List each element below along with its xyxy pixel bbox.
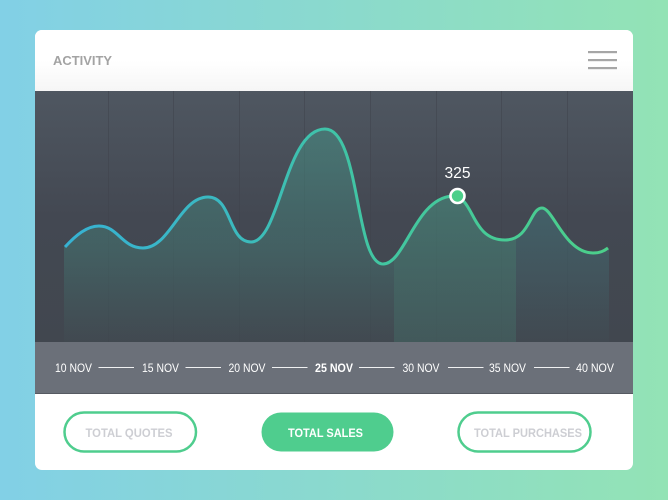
axis label: 10 NOV: 10 NOV [55,363,92,375]
button: total sales (active) [262,412,394,452]
data label: 325: 325 [444,165,470,182]
button: total sales (active): TOTAL SALES [288,426,363,440]
button: total quotes: TOTAL QUOTES [86,426,172,440]
axis label: 20 NOV: 20 NOV [228,363,266,375]
axis label: 25 NOV (active): 25 NOV [315,363,353,375]
panel: card header [35,30,633,91]
marker: selected data point [450,189,464,203]
axis label: 40 NOV: 40 NOV [576,363,614,375]
panel: activity card [35,30,633,470]
axis label: 30 NOV: 30 NOV [402,363,440,375]
chart: activity line [65,129,608,264]
button: total quotes [64,412,196,452]
button: total purchases [458,412,590,452]
axis label: 15 NOV: 15 NOV [142,363,179,375]
axis label: 35 NOV: 35 NOV [489,363,526,375]
panel: chart area [35,91,633,342]
heading: activity: ACTIVITY [53,53,112,68]
panel: date axis bar [35,342,633,394]
button: total purchases: TOTAL PURCHASES [474,426,582,440]
chart: area fill under curve [64,120,609,342]
icon: hamburger menu [588,51,617,69]
